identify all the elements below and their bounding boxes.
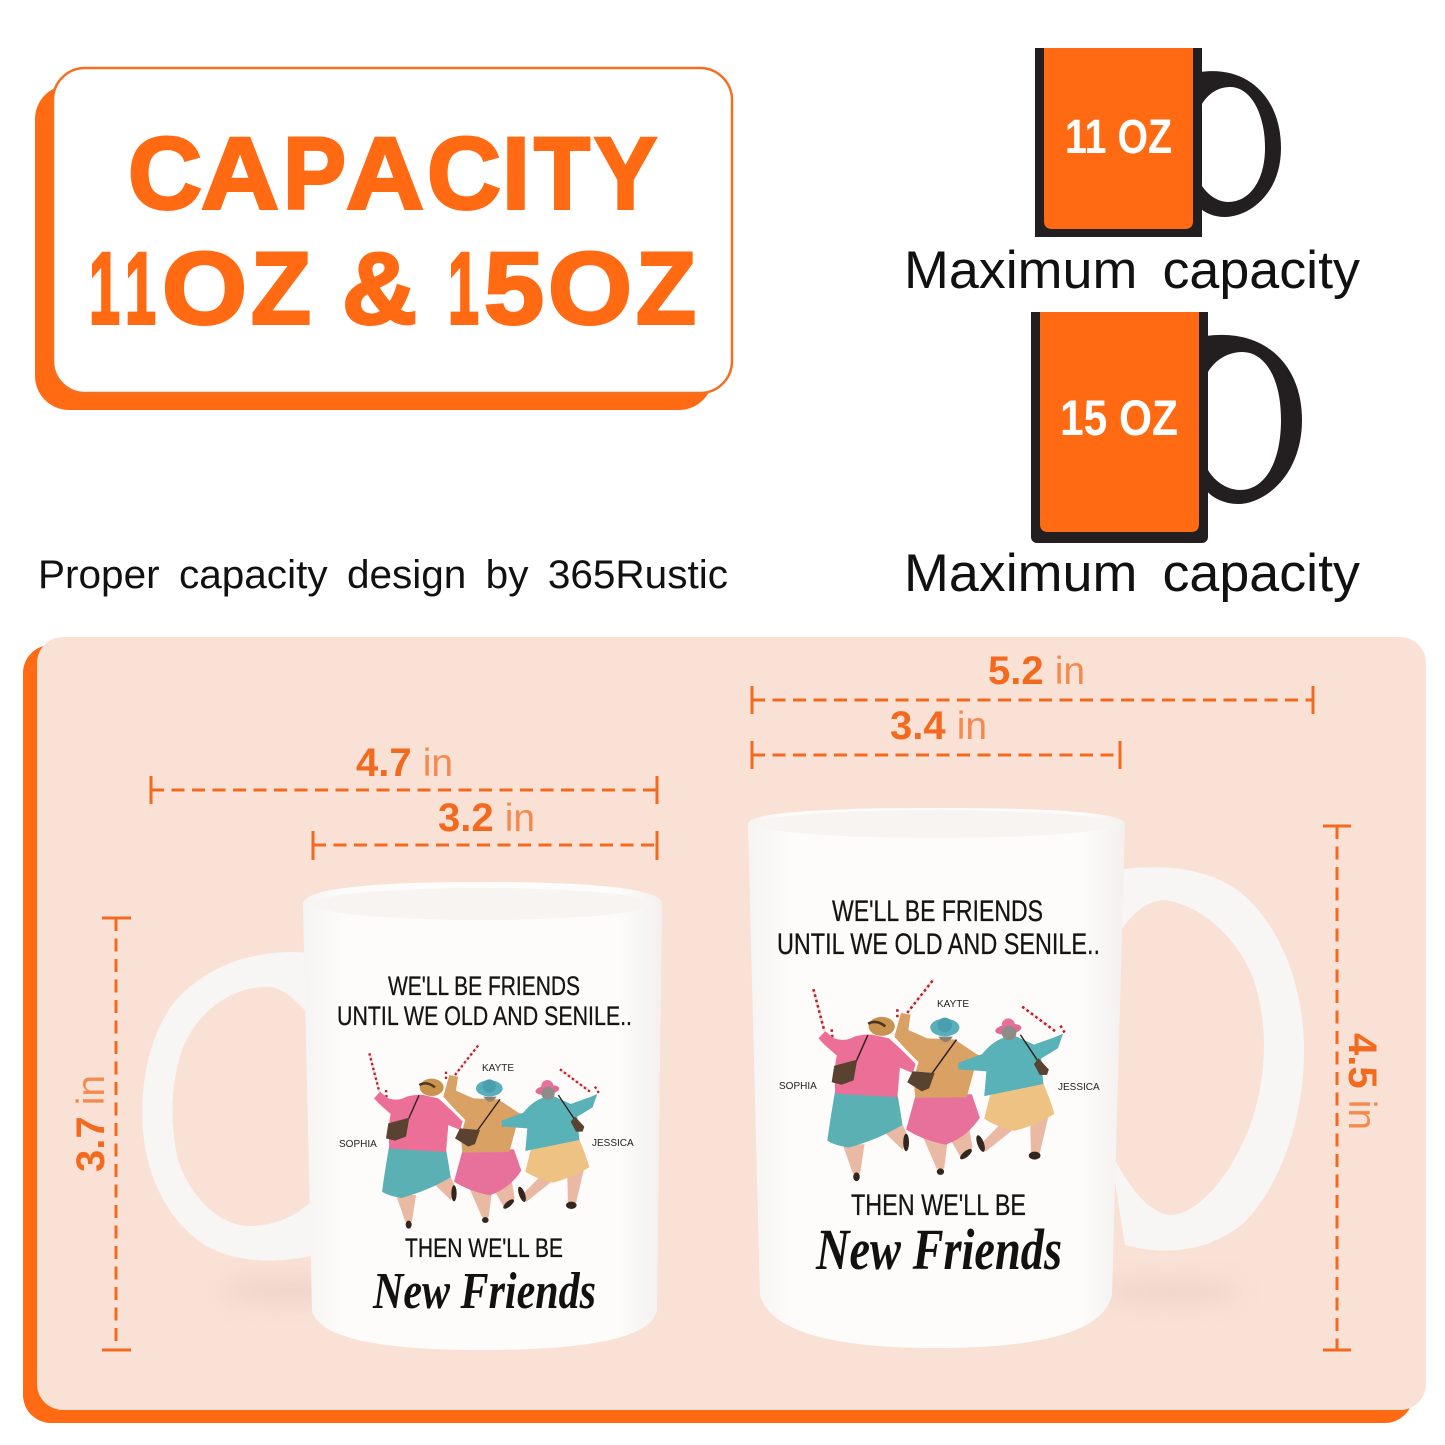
dimension: 3.7 in [69,918,131,1350]
mug shadows [220,1280,1240,1301]
heading line 2 [89,232,696,346]
11 oz mug photo: UNTIL WE OLD AND SENILE.. [337,1001,632,1031]
heading line 2: Z [636,232,696,346]
names: KAYTE [482,1063,514,1074]
mug text: WE'LL BE FRIENDS [388,971,580,1001]
mug text: WE'LL BE FRIENDS [832,895,1043,928]
11 oz mug photo: THEN WE'LL BE [405,1233,563,1263]
names [779,999,1100,1093]
dimension: 5.2 in: 5.2 in [988,649,1085,693]
title box [35,68,732,410]
names: SOPHIA [339,1139,377,1150]
dimension: 4.5 in [1323,826,1384,1350]
panel face [37,637,1426,1410]
15 oz mug photo [748,808,1304,1348]
names: SOPHIA [779,1081,817,1092]
body [303,882,662,1350]
caption 11 oz: Maximum capacity [904,241,1360,300]
11 oz mug photo [142,882,662,1350]
15 oz mug photo: THEN WE'LL BE [851,1189,1026,1222]
heading line 2: & [342,232,417,346]
heading line 1: C [128,116,202,230]
illustration: three dancing friends [813,979,1065,1181]
names [339,1063,634,1150]
dimension: 4.5 in: 4.5 in [1340,1033,1384,1130]
title box shadow [35,85,713,410]
heading line 2: 5 [484,232,544,346]
dimension: 3.2 in: 3.2 in [438,796,535,840]
heading line 2: 1 [125,232,156,346]
heading line 2: O [548,232,632,346]
heading line 1: T [534,116,590,230]
title box face [53,68,732,393]
rim [312,888,652,920]
15 oz mug photo: UNTIL WE OLD AND SENILE.. [777,928,1100,961]
handle [1110,867,1304,1251]
dimension: 3.4 in: 3.4 in [890,704,987,748]
panel shadow [23,645,1413,1423]
heading line 1 [128,116,657,230]
dimension: 3.7 in: 3.7 in [69,1075,113,1172]
11 oz mug photo: New Friends [372,1263,596,1320]
names: JESSICA [592,1138,634,1149]
panel: dimensions [23,637,1426,1423]
dimension: 5.2 in [752,649,1313,714]
dimension: 3.2 in [313,796,657,860]
heading line 1: P [283,116,346,230]
heading line 1: A [346,116,424,230]
icon: 15 oz mug [1031,312,1302,543]
dimension: 3.4 in [752,704,1120,769]
heading line 1: A [201,116,279,230]
icon: 15 oz mug: 15 OZ [1060,390,1178,446]
heading line 1: Y [594,116,657,230]
heading line 1: I [502,116,530,230]
heading line 2: Z [251,232,311,346]
rim [756,810,1116,838]
body [748,808,1125,1348]
tagline: Proper capacity design by 365Rustic [38,553,728,597]
caption 15 oz: Maximum capacity [904,544,1360,603]
names: KAYTE [937,999,969,1010]
icon: 11 oz mug [1035,48,1281,237]
dimension: 4.7 in: 4.7 in [356,741,453,785]
heading line 2: O [162,232,247,346]
heading line 1: C [427,116,501,230]
icon: 11 oz mug: 11 OZ [1065,111,1172,164]
dimension: 4.7 in [151,741,657,804]
heading line 2: 1 [89,232,120,346]
heading line 2: 1 [448,232,479,346]
illustration: three dancing friends [369,1044,599,1229]
names: JESSICA [1058,1082,1100,1093]
handle [142,952,315,1261]
15 oz mug photo: New Friends [815,1217,1062,1282]
